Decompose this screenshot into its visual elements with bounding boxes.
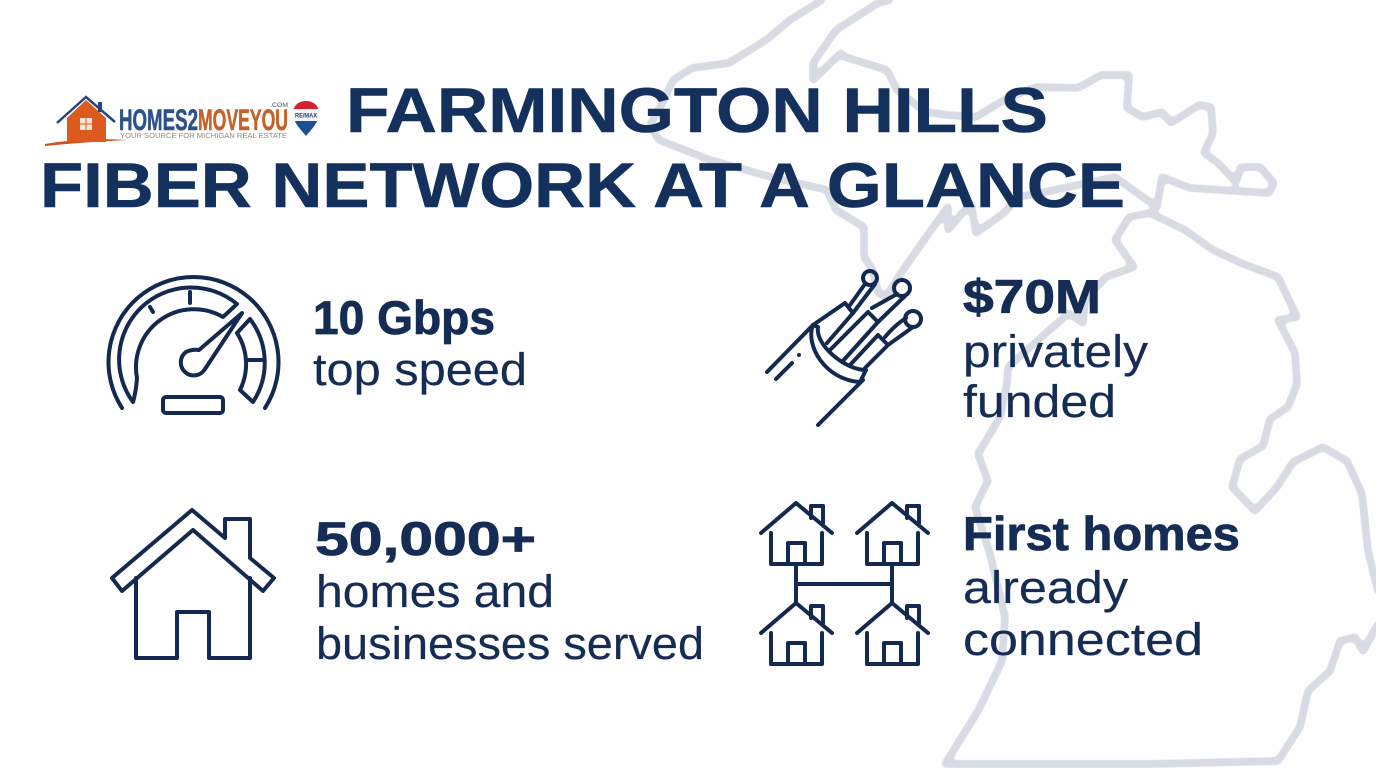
text: 50,000+ homes and businesses served: homes and bbox=[316, 566, 554, 617]
stat: homes served bbox=[112, 510, 704, 669]
text: First homes already connected bbox=[963, 507, 1240, 665]
stat: first homes bbox=[761, 503, 1240, 665]
text: $70M privately funded bbox=[963, 270, 1149, 427]
icon: connected houses bbox=[761, 503, 928, 664]
text: $70M privately funded: privately bbox=[963, 326, 1149, 377]
text: First homes already connected: connected bbox=[963, 614, 1203, 665]
text: First homes already connected: First homes bbox=[963, 507, 1240, 560]
title: FIBER NETWORK AT A GLANCE bbox=[40, 151, 1125, 221]
icon: house bbox=[112, 510, 274, 658]
logo house icon bbox=[45, 97, 127, 146]
text: 50,000+ homes and businesses served: businesses served bbox=[316, 618, 704, 669]
stat: funding bbox=[767, 270, 1149, 427]
icon: speedometer bbox=[109, 277, 279, 413]
text: First homes already connected: already bbox=[963, 562, 1129, 613]
text: 10 Gbps top speed: top speed bbox=[313, 344, 527, 395]
logo wordmark: HOMES2 bbox=[119, 104, 198, 137]
logo balloon: RE/MAX bbox=[295, 114, 317, 120]
text: 50,000+ homes and businesses served: 50,000+ bbox=[315, 512, 536, 565]
text: $70M privately funded: $70M bbox=[963, 270, 1101, 323]
title: FARMINGTON HILLS bbox=[346, 76, 1048, 146]
stat: top speed bbox=[109, 277, 527, 413]
background map: Michigan outline bbox=[650, 0, 1376, 764]
text: 10 Gbps top speed bbox=[313, 291, 527, 395]
logo: Homes2MoveYou RE/MAX: MOVEYOU bbox=[198, 104, 288, 137]
text: 10 Gbps top speed: 10 Gbps bbox=[313, 291, 495, 344]
text: $70M privately funded: funded bbox=[963, 376, 1116, 427]
logo: Homes2MoveYou RE/MAX: YOUR SOURCE FOR MICHIGAN REAL ESTATE bbox=[120, 131, 287, 140]
logo balloon bbox=[293, 101, 319, 136]
title bbox=[40, 76, 1125, 221]
icon: fiber optic cable bbox=[767, 271, 921, 425]
logo: Homes2MoveYou RE/MAX bbox=[45, 97, 322, 146]
logo: Homes2MoveYou RE/MAX: .COM bbox=[270, 102, 288, 109]
text: 50,000+ homes and businesses served bbox=[315, 512, 704, 669]
